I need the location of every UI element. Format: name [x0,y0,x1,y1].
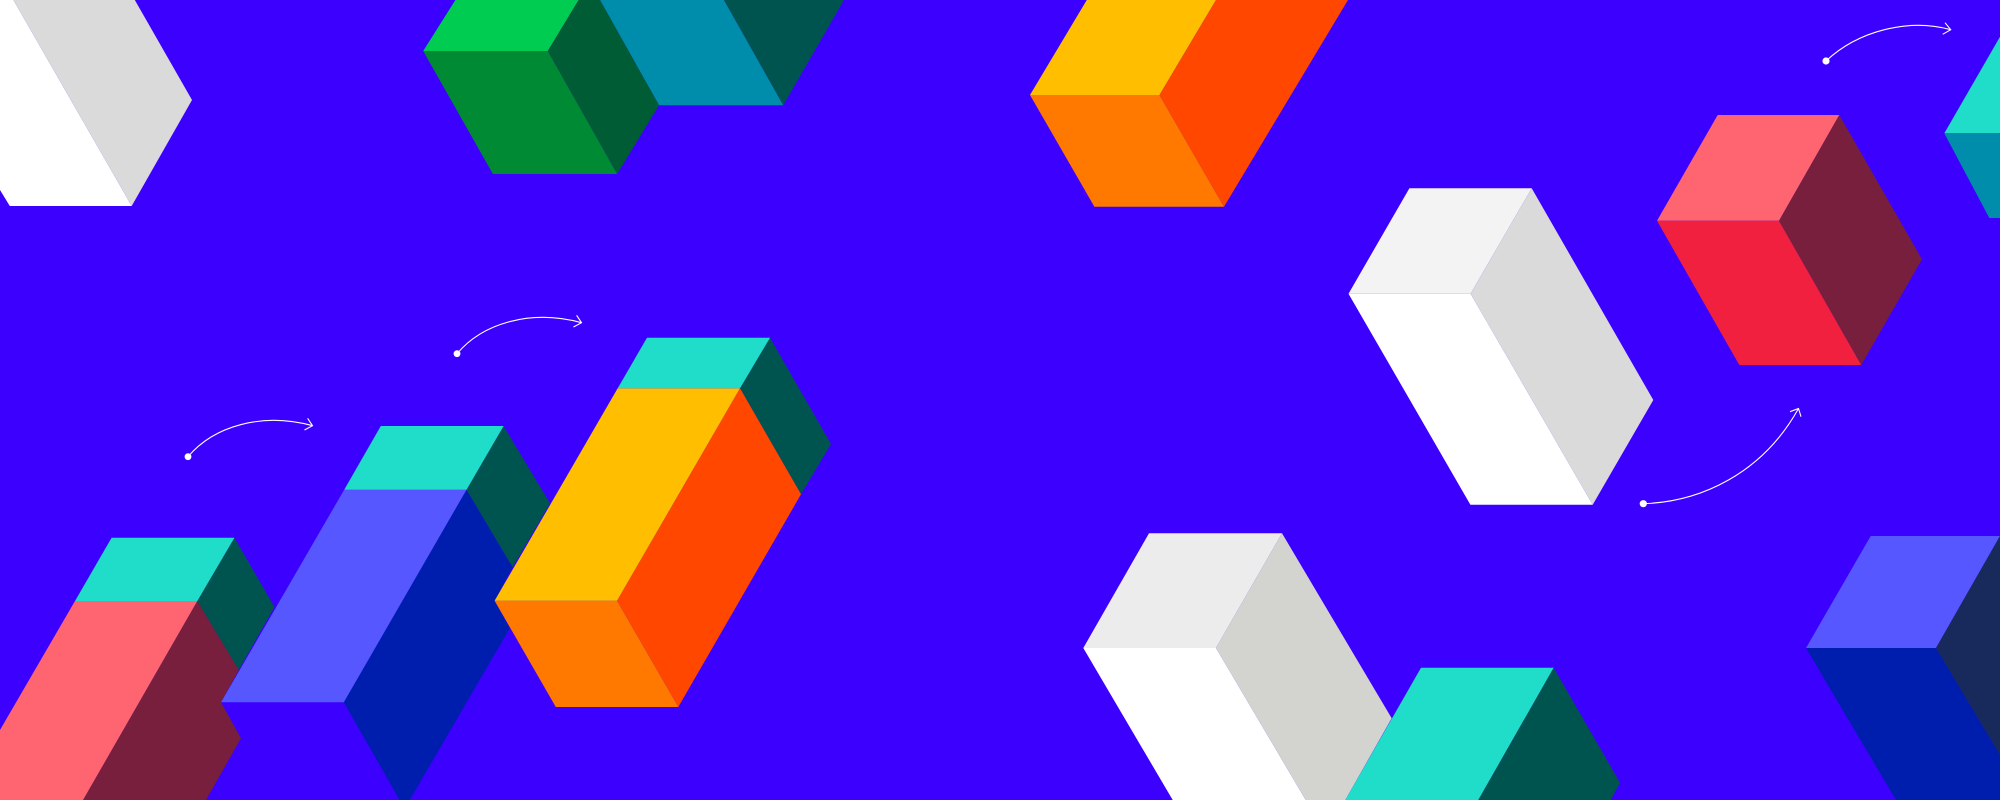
face: grey side [13,0,192,206]
face: dark green side [548,0,659,174]
cube: teal-blue top [600,0,844,105]
face: periwinkle top [1806,536,2000,648]
face: yellow front [495,388,740,601]
face: blue-teal front [1944,133,2000,218]
face: teal top [344,426,504,490]
stack: teal, yellow and orange [495,338,831,707]
face: warm grey side [1216,533,1392,800]
face: red-orange side [617,388,801,707]
face: coral front [0,601,197,800]
cube: teal bottom centre [1345,668,1620,800]
face: dark teal side [740,338,831,494]
arrow: curved, lower left [185,418,312,460]
face: periwinkle front [221,490,466,702]
face: grey side [1471,188,1653,505]
face: maroon side [1779,115,1922,365]
face: teal top [1345,668,1554,800]
cube: white top-left [0,0,192,206]
cube: green top [423,0,659,174]
cube: coral and red [1657,115,1922,365]
face: orange front [1030,95,1224,207]
face: pale grey top [1083,533,1282,648]
face: light grey top [1348,188,1532,294]
face: mid green front [423,51,617,174]
arrow: curved, middle left [454,315,582,357]
face: teal top [1944,37,2000,133]
cube: light grey bottom centre [1083,533,1392,800]
arrow: curved, top right [1822,23,1951,65]
arrow: curved, right centre [1640,408,1801,507]
cube: periwinkle and navy bottom right [1806,536,2000,800]
face: red front [1657,221,1861,365]
face: dark navy side [1936,536,2000,755]
face: dark teal side [466,426,550,567]
face: white front [0,0,132,206]
face: blue-teal front [600,0,783,105]
face: dark teal side [197,538,274,670]
stack: teal and periwinkle middle [221,426,550,800]
face: yellow top [1030,0,1216,95]
face: teal top [618,338,770,388]
face: navy side [344,490,512,800]
face: orange front [495,601,678,707]
face: dark teal side [1478,668,1620,800]
face: white front [1083,648,1306,800]
face: coral top [1657,115,1839,221]
face: teal top [75,538,234,601]
face: maroon side [83,601,241,800]
face: bright green top [423,0,579,51]
cube: yellow and orange top centre [1030,0,1348,207]
cube: teal at right edge [1944,37,2000,218]
face: red-orange side [1160,0,1348,207]
face: navy front [1806,648,2000,800]
face: white front [1348,294,1593,505]
stack: teal and coral bottom left [0,538,274,800]
face: dark teal side [724,0,844,105]
cube: white centre right [1348,188,1653,505]
